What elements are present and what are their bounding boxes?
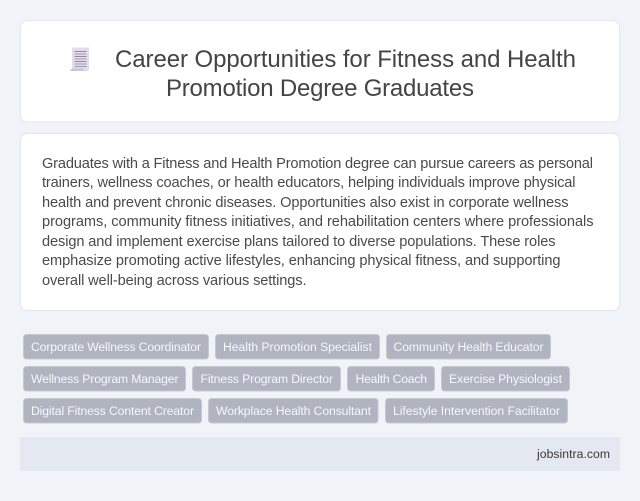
tag: Exercise Physiologist <box>442 366 570 391</box>
tag: Community Health Educator <box>386 334 550 359</box>
tags: career roles <box>24 334 570 423</box>
footer <box>20 437 620 471</box>
title: Career Opportunities for Fitness and Health <box>115 46 576 73</box>
text block: description <box>42 156 594 289</box>
text block: description: overall well-being across various settings. <box>42 273 306 289</box>
tag: Corporate Wellness Coordinator: Corporate Wellness Coordinator <box>31 340 201 354</box>
tag: Digital Fitness Content Creator: Digital Fitness Content Creator <box>31 404 194 418</box>
panel: description <box>20 134 620 310</box>
tag: Health Coach: Health Coach <box>356 372 427 386</box>
tag: Health Coach <box>348 366 434 391</box>
tag: Community Health Educator: Community Health Educator <box>394 340 544 354</box>
text block: description: programs, community fitness initiatives, and rehabilitation centers where professionals <box>42 214 594 230</box>
title: Promotion Degree Graduates <box>166 75 474 102</box>
tag: Wellness Program Manager <box>24 366 186 391</box>
footer text: jobsintra.com <box>536 447 610 461</box>
tag: Wellness Program Manager: Wellness Program Manager <box>31 372 178 386</box>
tag: Corporate Wellness Coordinator <box>24 334 208 359</box>
tag: Fitness Program Director <box>192 366 340 391</box>
panel: header <box>20 20 620 122</box>
tag: Health Promotion Specialist <box>216 334 380 359</box>
text block: description: emphasize promoting active lifestyles, enhancing physical fitness, and supporting <box>42 253 560 269</box>
tag: Digital Fitness Content Creator <box>24 398 202 423</box>
text block: description: trainers, wellness coaches, or health educators, helping individuals improve physical <box>42 175 576 191</box>
title <box>115 46 576 102</box>
tag: Exercise Physiologist: Exercise Physiologist <box>449 372 563 386</box>
text block: description: design and implement exercise plans tailored to diverse populations. These roles <box>42 234 556 250</box>
tag: Health Promotion Specialist: Health Promotion Specialist <box>223 340 373 354</box>
icon: document scroll <box>70 48 89 71</box>
tag: Lifestyle Intervention Facilitator <box>386 398 568 423</box>
tag: Workplace Health Consultant <box>208 398 378 423</box>
text block: description: health and prevent chronic diseases. Opportunities also exist in corporate wellness <box>42 195 568 211</box>
tag: Workplace Health Consultant: Workplace Health Consultant <box>216 404 372 418</box>
text block: description: Graduates with a Fitness and Health Promotion degree can pursue careers as personal <box>42 156 593 172</box>
tag: Lifestyle Intervention Facilitator: Lifestyle Intervention Facilitator <box>393 404 560 418</box>
tag: Fitness Program Director: Fitness Program Director <box>200 372 333 386</box>
